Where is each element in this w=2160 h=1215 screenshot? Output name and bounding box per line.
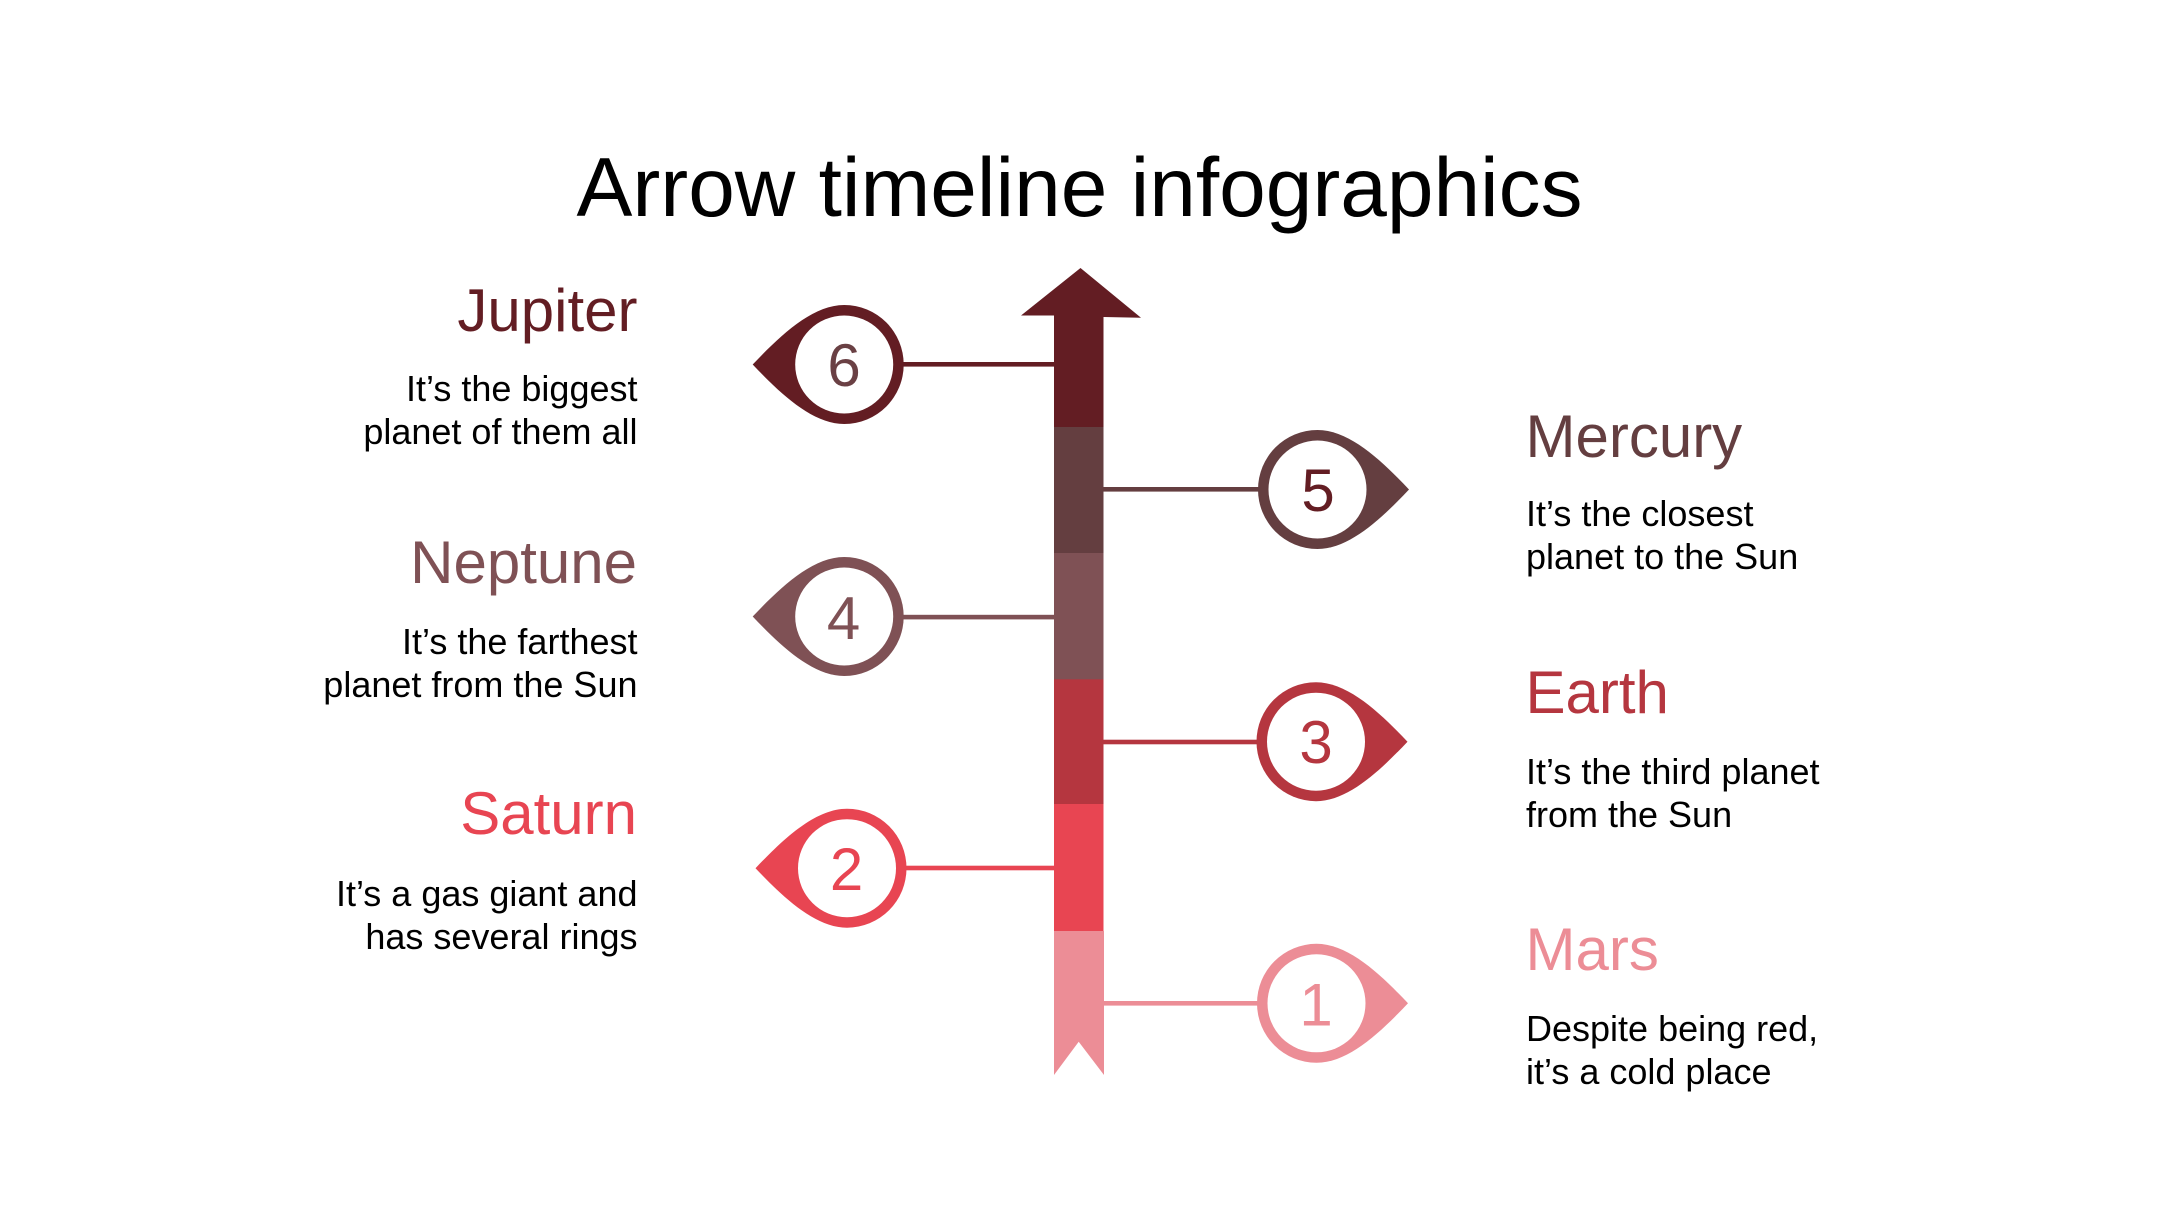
connector line 5 [1103, 487, 1261, 492]
connector line 2 [903, 866, 1055, 870]
number 5: 5 [1301, 457, 1335, 524]
heading: Jupiter: Jupiter [457, 277, 638, 344]
description: Jupiter: planet of them all [363, 411, 638, 452]
description: Saturn: has several rings [365, 916, 638, 957]
heading: Neptune: Neptune [410, 529, 637, 596]
arrow segment 3 [1054, 679, 1104, 804]
description: Saturn: It’s a gas giant and [336, 873, 638, 914]
panel: Mars [1526, 916, 1818, 1092]
number 6: 6 [827, 332, 861, 399]
panel: Neptune [323, 529, 638, 705]
description: Jupiter: It’s the biggest [406, 368, 638, 409]
heading: Earth: Earth [1526, 659, 1669, 726]
marker 6 [753, 305, 904, 424]
title: Arrow timeline infographics [577, 140, 1582, 234]
panel: Mercury [1526, 403, 1798, 577]
panel: Earth [1526, 659, 1820, 835]
description: Mercury: It’s the closest [1526, 493, 1753, 534]
marker 1 [1257, 944, 1408, 1063]
number 1: 1 [1299, 972, 1333, 1038]
arrow segment 6 with arrowhead [1021, 268, 1141, 428]
number 4: 4 [827, 585, 860, 652]
marker 3 [1256, 682, 1408, 801]
arrow segment 4 [1054, 553, 1104, 680]
connector line 4 [900, 615, 1055, 619]
description: Neptune: It’s the farthest [402, 621, 638, 662]
description: Mars: Despite being red, [1526, 1008, 1818, 1049]
marker 5 [1258, 430, 1409, 549]
arrow segment 2 [1054, 804, 1104, 931]
arrow segment 1 with notched tail [1054, 931, 1104, 1075]
description: Mercury: planet to the Sun [1526, 536, 1798, 577]
panel: Jupiter [363, 277, 638, 452]
marker 4 [753, 557, 904, 676]
description: Neptune: planet from the Sun [323, 664, 638, 705]
description: Mars: it’s a cold place [1526, 1051, 1771, 1092]
heading: Mercury: Mercury [1526, 403, 1742, 470]
heading: Saturn: Saturn [460, 780, 637, 847]
connector line 1 [1103, 1001, 1261, 1006]
connector line 6 [900, 362, 1055, 367]
connector line 3 [1103, 740, 1261, 744]
number 2: 2 [830, 836, 863, 903]
heading: Mars: Mars [1526, 916, 1659, 983]
central arrow [1021, 268, 1141, 1075]
description: Earth: It’s the third planet [1526, 751, 1820, 792]
arrow segment 5 [1054, 427, 1104, 553]
panel: Saturn [336, 780, 638, 957]
number 3: 3 [1299, 709, 1333, 776]
description: Earth: from the Sun [1526, 794, 1732, 835]
marker 2 [756, 809, 906, 928]
